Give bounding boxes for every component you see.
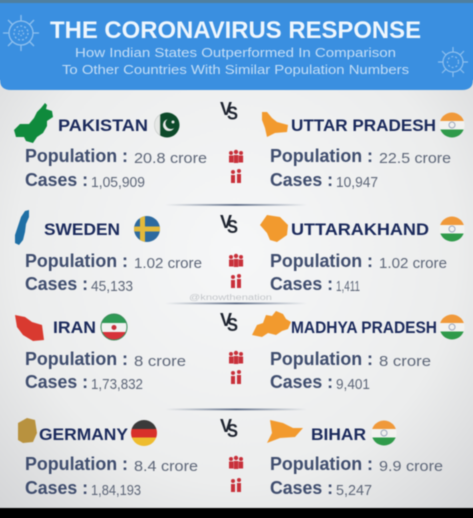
VS badge: S (227, 315, 238, 335)
right stats: Population : (270, 454, 373, 474)
icon: people (229, 456, 243, 492)
left stats: 45,133 (91, 279, 133, 295)
row: Iran vs Madhya Pradesh (15, 310, 465, 393)
left stats: 8.4 crore (134, 459, 198, 475)
left stats: Cases : (25, 170, 88, 190)
left stats (25, 349, 186, 393)
right stats: 1,411 (336, 279, 360, 295)
row: Sweden vs Uttarakhand (15, 210, 465, 295)
Sweden label: SWEDEN (44, 221, 120, 239)
VS badge: S (227, 104, 238, 124)
right stats: 9,401 (336, 377, 370, 393)
VS badge: V (220, 416, 232, 436)
right stats: Cases : (270, 372, 333, 392)
row: Germany vs Bihar (18, 416, 443, 499)
left stats: Cases : (25, 372, 88, 392)
right stats: 1.02 crore (379, 256, 447, 272)
right stats: Population : (270, 146, 373, 166)
VS badge (220, 99, 238, 124)
right stats: 8 crore (379, 354, 431, 370)
icon: Sweden map (15, 210, 29, 245)
icon: Pakistan map (14, 103, 53, 143)
VS badge: S (227, 421, 238, 441)
VS badge (220, 310, 238, 335)
icon: Uttar Pradesh map (262, 112, 288, 137)
right stats: 22.5 crore (379, 151, 451, 167)
Bihar label: BIHAR (311, 426, 366, 444)
VS badge: V (220, 99, 232, 119)
icon: Bihar map (267, 420, 303, 443)
left stats: 1.02 crore (134, 256, 202, 272)
icon: Germany flag (131, 420, 157, 446)
VS badge (220, 212, 238, 237)
left stats (25, 251, 202, 295)
icon: Sweden flag (134, 216, 160, 242)
left stats: 1,84,193 (91, 483, 141, 499)
header banner (0, 0, 473, 90)
right stats (270, 454, 443, 499)
VS badge (220, 416, 238, 441)
icon: Iran flag (101, 314, 127, 341)
right stats: 10,947 (336, 175, 378, 191)
right stats: Population : (270, 349, 373, 369)
left stats: Population : (25, 349, 128, 369)
right stats (270, 251, 447, 295)
subtitle: How Indian States Outperformed In Comparison (75, 46, 396, 60)
icon: India flag (371, 420, 397, 446)
icon: Pakistan flag (154, 112, 180, 138)
subtitle: To Other Countries With Similar Population Numbers (62, 63, 409, 77)
dividers (165, 204, 307, 410)
right stats: Population : (270, 251, 373, 271)
left stats (25, 454, 198, 499)
icon: virus right (438, 47, 468, 77)
icon: Uttarakhand map (260, 215, 288, 242)
right stats: Cases : (270, 478, 333, 498)
left stats: 8 crore (134, 354, 186, 370)
Madhya Pradesh label: MADHYA PRADESH (291, 319, 437, 337)
icon: virus left (3, 15, 39, 51)
left stats: 1,05,909 (91, 175, 145, 191)
watermark: @knowthenation (189, 293, 272, 302)
right stats: 5,247 (336, 483, 372, 499)
icon: people (229, 150, 243, 183)
Uttarakhand label: UTTARAKHAND (291, 221, 429, 239)
right stats: 9.9 crore (379, 459, 443, 475)
right stats (270, 146, 451, 191)
left stats: Population : (25, 146, 128, 166)
icon: Iran map (15, 315, 44, 341)
icon: India flag (439, 112, 465, 138)
subtitle (62, 46, 409, 77)
left stats: 1,73,832 (91, 377, 143, 393)
VS badge: V (220, 310, 232, 330)
icon: Madhya Pradesh map (252, 311, 291, 337)
right stats: Cases : (270, 274, 333, 294)
left stats: Population : (25, 251, 128, 271)
icon: India flag (439, 216, 465, 242)
Uttar Pradesh label: UTTAR PRADESH (291, 117, 436, 135)
left stats: Cases : (25, 478, 88, 498)
row: Pakistan vs Uttar Pradesh (14, 99, 465, 191)
right stats: Cases : (270, 170, 333, 190)
left stats: 20.8 crore (134, 151, 207, 167)
Pakistan label: PAKISTAN (58, 117, 148, 135)
icon: Germany map (18, 418, 37, 443)
VS badge: V (220, 212, 232, 232)
title: THE CORONAVIRUS RESPONSE (50, 17, 421, 44)
icon: people (229, 254, 243, 288)
right stats (270, 349, 431, 393)
left stats (25, 146, 207, 191)
left stats: Cases : (25, 274, 88, 294)
VS badge: S (227, 217, 238, 237)
Iran label: IRAN (53, 319, 96, 337)
icon: India flag (439, 314, 465, 340)
icon: people (229, 351, 243, 384)
Germany label: GERMANY (39, 426, 128, 444)
left stats: Population : (25, 454, 128, 474)
